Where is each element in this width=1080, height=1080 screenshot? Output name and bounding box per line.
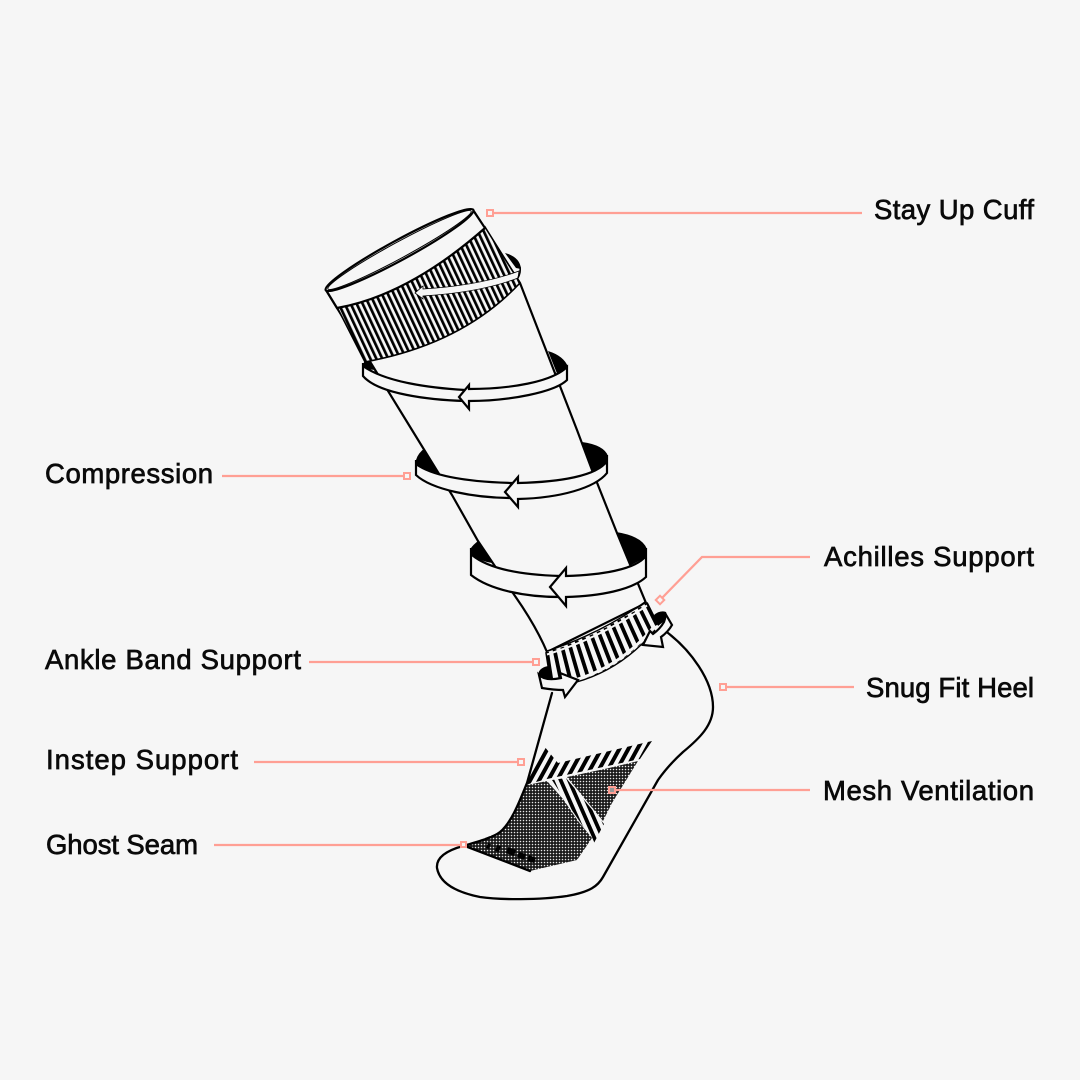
callout: Ankle Band Support: Ankle Band Support bbox=[45, 644, 301, 675]
callout: Mesh Ventilation: Mesh Ventilation bbox=[823, 775, 1034, 806]
mesh ventilation panel bbox=[567, 761, 638, 821]
ankle right arrow bbox=[643, 611, 672, 647]
sock illustration bbox=[321, 201, 713, 899]
ankle left arrow bbox=[538, 666, 578, 697]
callout: Ghost Seam bbox=[46, 829, 466, 860]
callout: Ghost Seam: Ghost Seam bbox=[46, 829, 198, 860]
callout: Mesh Ventilation bbox=[609, 775, 1034, 806]
foot outline bbox=[437, 633, 713, 899]
callout: Snug Fit Heel bbox=[720, 672, 1034, 703]
compression ring 3 bbox=[471, 548, 646, 606]
callout: Stay Up Cuff: Stay Up Cuff bbox=[874, 194, 1034, 225]
callout: Compression: Compression bbox=[45, 458, 213, 489]
leg outline bbox=[326, 210, 646, 652]
callout: Achilles Support: Achilles Support bbox=[824, 541, 1034, 572]
callout: Compression bbox=[45, 458, 410, 489]
callout: Snug Fit Heel: Snug Fit Heel bbox=[866, 672, 1034, 703]
mesh toe panel bbox=[465, 781, 592, 871]
callout: Instep Support bbox=[46, 744, 524, 775]
ring back wedges bbox=[363, 253, 647, 566]
callout: Instep Support: Instep Support bbox=[46, 744, 238, 775]
compression ring 2 bbox=[416, 455, 607, 507]
ankle band bbox=[547, 602, 657, 684]
instep stripes upper bbox=[528, 741, 652, 784]
callout: Stay Up Cuff bbox=[487, 194, 1034, 225]
stay up cuff bbox=[321, 201, 520, 362]
instep stripes lower bbox=[552, 778, 604, 843]
callout: Achilles Support bbox=[656, 541, 1034, 604]
compression ring 1 bbox=[363, 363, 567, 409]
callout: Ankle Band Support bbox=[45, 644, 539, 675]
cuff arrow bbox=[415, 267, 520, 299]
